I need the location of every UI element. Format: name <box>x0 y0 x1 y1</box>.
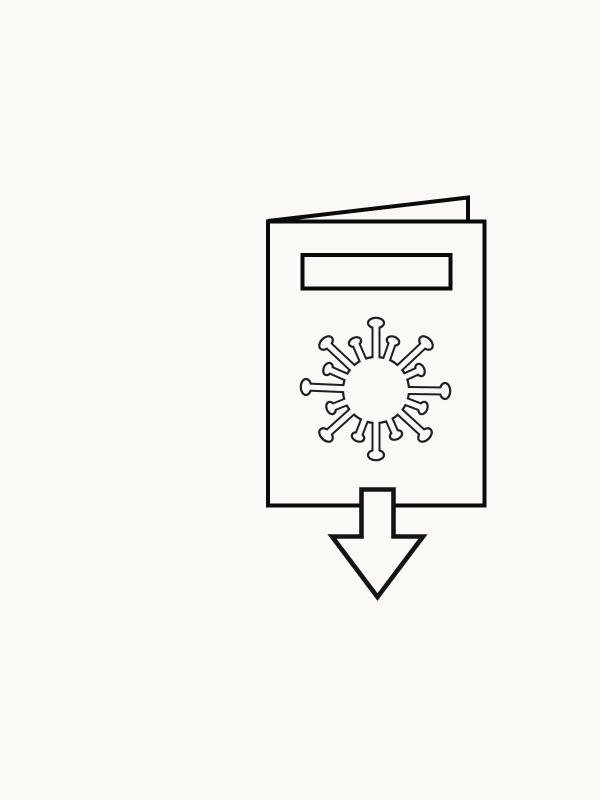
icon: booklet <box>268 198 484 506</box>
icon: virus <box>301 318 450 460</box>
arrow: download <box>332 490 423 597</box>
booklet back cover <box>268 198 468 221</box>
booklet title box <box>302 255 450 288</box>
booklet front cover <box>268 222 484 506</box>
